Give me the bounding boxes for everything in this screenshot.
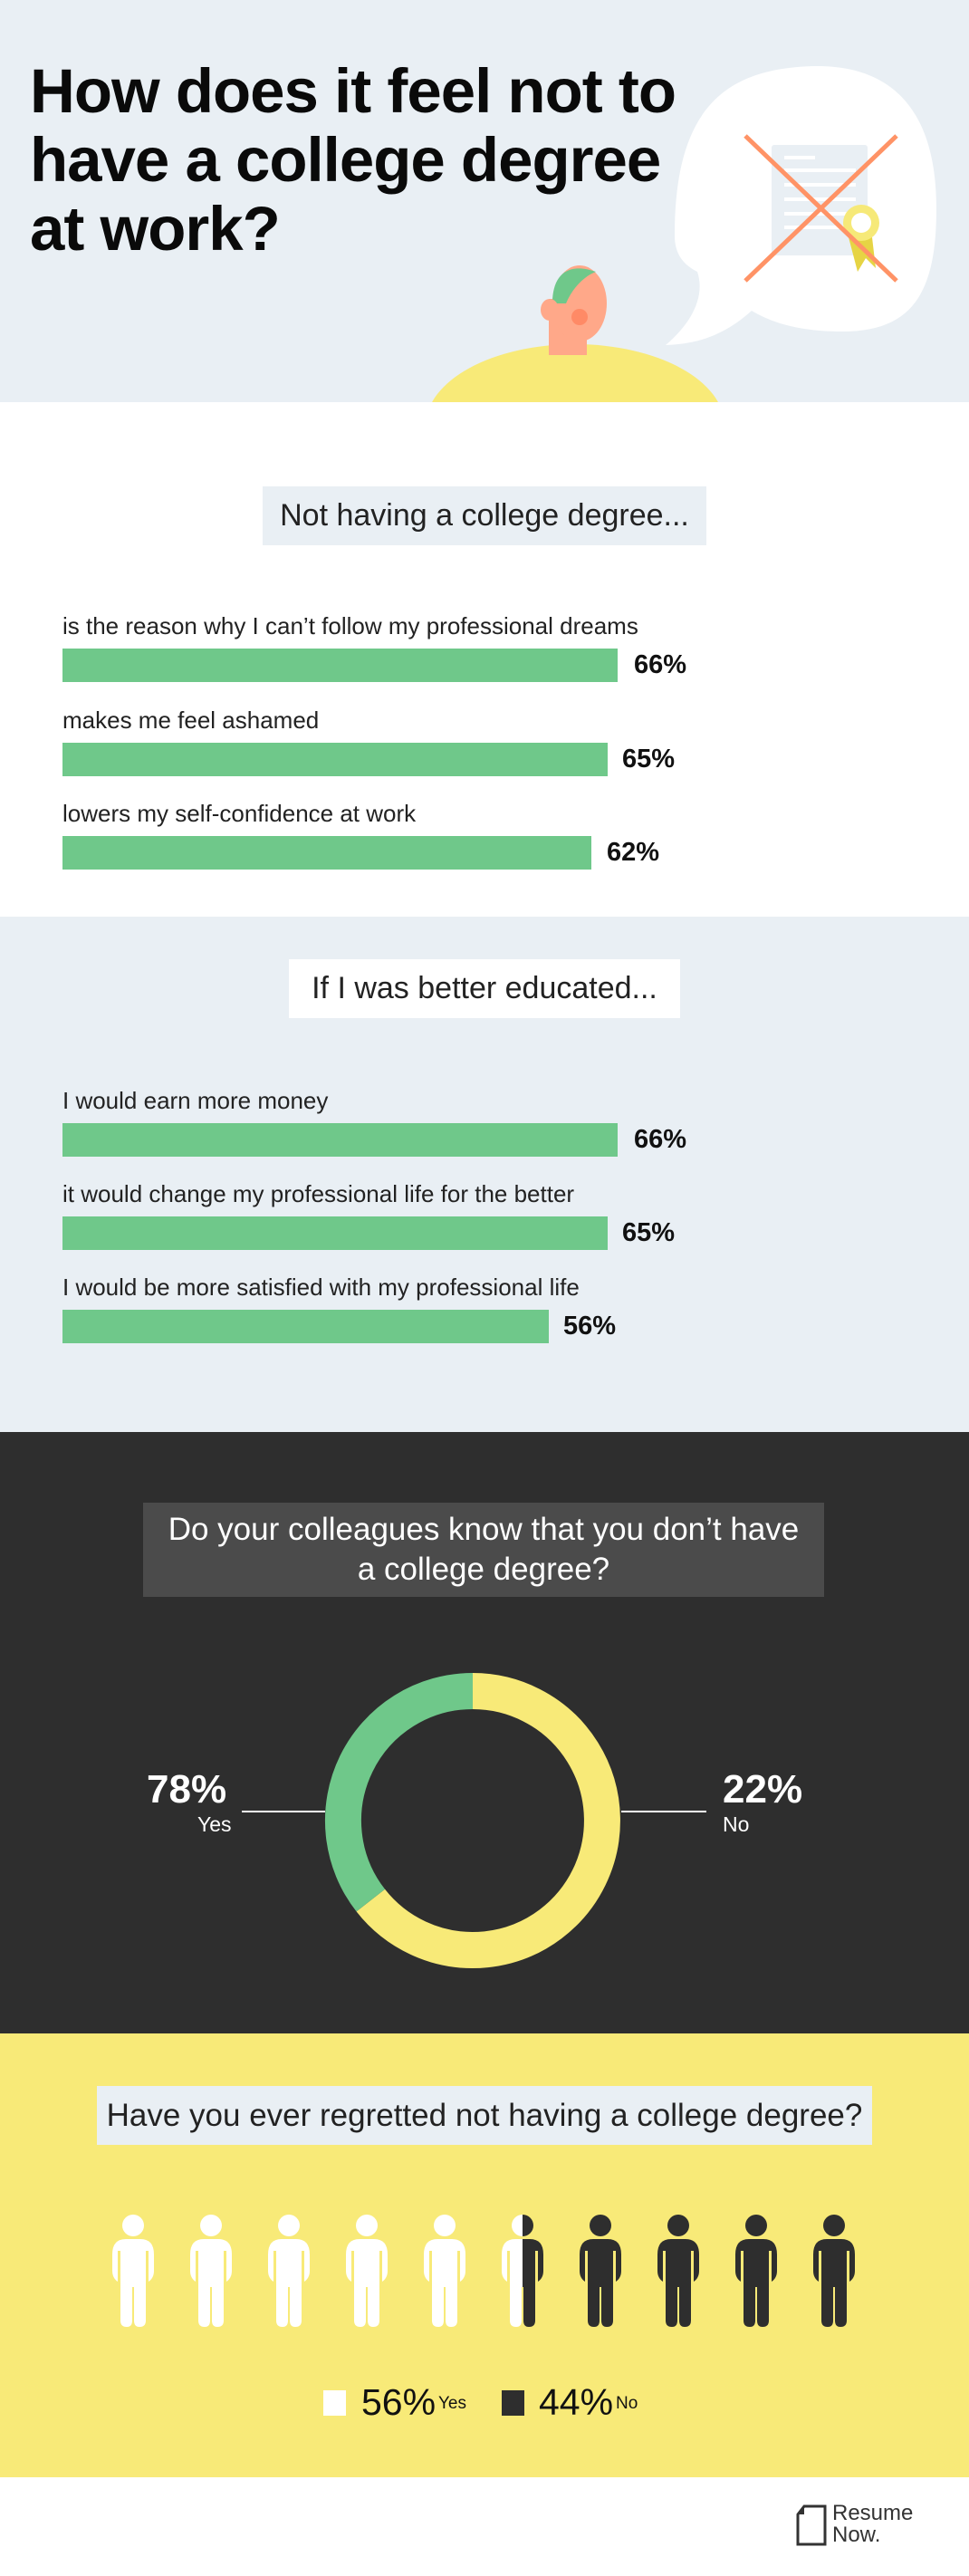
title: have a college degree	[30, 125, 660, 195]
label: no: 22%	[723, 1767, 802, 1812]
label: yes: 78%	[147, 1767, 226, 1812]
heading box: Do your colleagues know that you don’t have	[168, 1512, 799, 1547]
bar 2: makes me feel ashamed	[62, 706, 319, 734]
label: no	[723, 1767, 802, 1836]
bar 1: 66%	[634, 650, 686, 679]
heading box	[143, 1503, 824, 1597]
heading box	[263, 486, 706, 545]
bar 3: I would be more satisfied with my professional life	[62, 1274, 580, 1301]
heading box	[97, 2086, 872, 2145]
logo: Now.	[832, 2523, 880, 2547]
pictogram	[112, 2215, 855, 2327]
bar 3	[62, 800, 659, 870]
panel: regret	[0, 2033, 969, 2477]
bar 2: it would change my professional life for the better	[62, 1180, 574, 1207]
title: at work?	[30, 194, 280, 264]
header panel	[0, 0, 969, 402]
panel: if I was better educated	[0, 917, 969, 1432]
title: How does it feel not to	[30, 56, 676, 126]
bar 2	[62, 1180, 675, 1250]
legend: 56%	[361, 2381, 436, 2423]
bar 1	[62, 612, 686, 682]
legend	[323, 2381, 638, 2423]
bar 3: lowers my self-confidence at work	[62, 800, 416, 827]
panel: colleagues donut	[0, 1432, 969, 2033]
bar 3: 62%	[607, 838, 659, 867]
bar 1: is the reason why I can’t follow my professional dreams	[62, 612, 638, 639]
legend: 44%	[539, 2381, 613, 2423]
panel: not having a college degree	[0, 402, 969, 917]
illustration: speech bubble with crossed diploma	[432, 66, 936, 402]
bar 1: I would earn more money	[62, 1087, 328, 1114]
legend: Yes	[438, 2394, 466, 2413]
heading box: Not having a college degree...	[280, 498, 689, 533]
label: no: No	[723, 1812, 749, 1836]
bar 1	[62, 1087, 686, 1157]
heading box: If I was better educated...	[312, 971, 657, 1005]
logo: Resume	[832, 2501, 913, 2525]
label: yes: Yes	[197, 1812, 232, 1836]
heading box: Have you ever regretted not having a college degree?	[107, 2098, 862, 2132]
heading box: a college degree?	[358, 1552, 609, 1587]
label: yes	[147, 1767, 232, 1836]
bar 3: 56%	[563, 1312, 616, 1341]
title	[30, 56, 676, 264]
bar 2: 65%	[622, 1218, 675, 1247]
legend: No	[616, 2394, 638, 2413]
heading box	[289, 959, 680, 1018]
bar 3	[62, 1274, 616, 1343]
bar 1: 66%	[634, 1125, 686, 1154]
logo	[797, 2501, 913, 2547]
bar 2: 65%	[622, 745, 675, 774]
bar 2	[62, 706, 675, 776]
donut chart	[242, 1673, 706, 1968]
